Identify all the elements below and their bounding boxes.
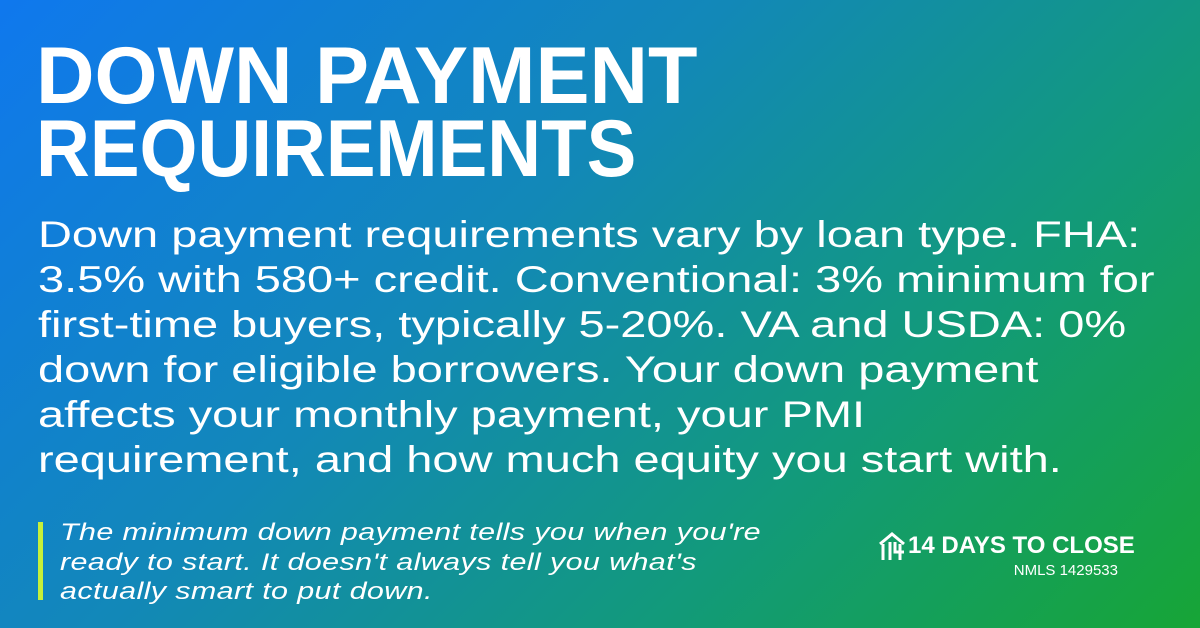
title (36, 31, 698, 194)
body text: 3.5% with 580+ credit. Conventional: 3% minimum for (38, 259, 1155, 300)
icon: house 14 (879, 532, 905, 560)
NMLS: NMLS 1429533 (1014, 562, 1118, 579)
title: REQUIREMENTS (36, 104, 636, 194)
brand name: 14 DAYS TO CLOSE (908, 532, 1135, 559)
title: DOWN PAYMENT (36, 31, 698, 121)
quote text: actually smart to put down. (60, 578, 433, 605)
callout: quote (38, 519, 761, 605)
body text: first-time buyers, typically 5-20%. VA and USDA: 0% (38, 304, 1126, 345)
quote text (60, 519, 761, 605)
body text: affects your monthly payment, your PMI (38, 394, 865, 435)
quote text: The minimum down payment tells you when you're (60, 519, 761, 546)
body text (38, 214, 1155, 480)
quote text: ready to start. It doesn't always tell you what's (60, 548, 697, 576)
body text: requirement, and how much equity you start with. (38, 439, 1062, 480)
body text: down for eligible borrowers. Your down payment (38, 349, 1038, 390)
body text: Down payment requirements vary by loan type. FHA: (38, 214, 1140, 255)
logo (879, 532, 1135, 579)
